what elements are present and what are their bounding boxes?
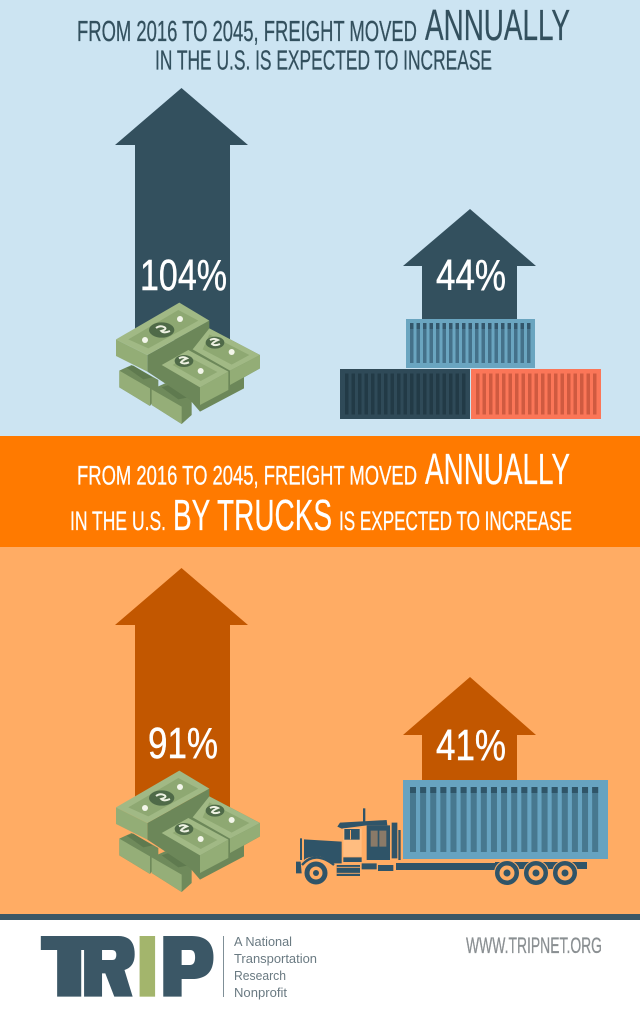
arrow: 41% tonnage: [403, 677, 536, 782]
icon: money stack top: [116, 303, 260, 424]
stat: 41%: 41%: [436, 722, 506, 770]
icon: truck with container: [296, 780, 608, 886]
icon: stacked shipping containers: [340, 319, 601, 419]
background: top panel: [0, 0, 640, 436]
stat: 104%: 104%: [140, 252, 227, 300]
banner: orange heading band: [0, 436, 640, 547]
logo tagline: Transportation: [234, 951, 317, 966]
logo tagline: [234, 934, 317, 1000]
logo tagline: A National: [234, 934, 292, 949]
logo tagline: Research: [234, 968, 286, 983]
heading: total freight: [77, 2, 570, 76]
footer: dark strip: [0, 914, 640, 920]
background: lower panel: [0, 547, 640, 914]
heading: freight by trucks: [70, 446, 572, 540]
footer: white panel: [0, 920, 640, 1024]
stat: 91%: 91%: [148, 720, 218, 768]
heading: freight by trucks: FROM 2016 TO 2045, FREIGHT MOVED: [77, 460, 417, 490]
logo tagline: Nonprofit: [234, 985, 287, 1000]
heading: freight by trucks: IN THE U.S.: [70, 506, 166, 536]
heading: total freight: FROM 2016 TO 2045, FREIGHT MOVED: [77, 16, 417, 48]
arrow: 104% value: [115, 88, 248, 340]
arrow: 91% value: [115, 568, 248, 810]
arrow: 44% tonnage: [403, 209, 536, 320]
stat: 44%: 44%: [436, 252, 506, 300]
heading: freight by trucks: BY TRUCKS: [173, 492, 332, 540]
chassis rail: [396, 862, 587, 870]
icon: money stack bottom: [116, 771, 260, 892]
logo: TRIP: [41, 936, 213, 997]
logo divider: [223, 936, 224, 997]
